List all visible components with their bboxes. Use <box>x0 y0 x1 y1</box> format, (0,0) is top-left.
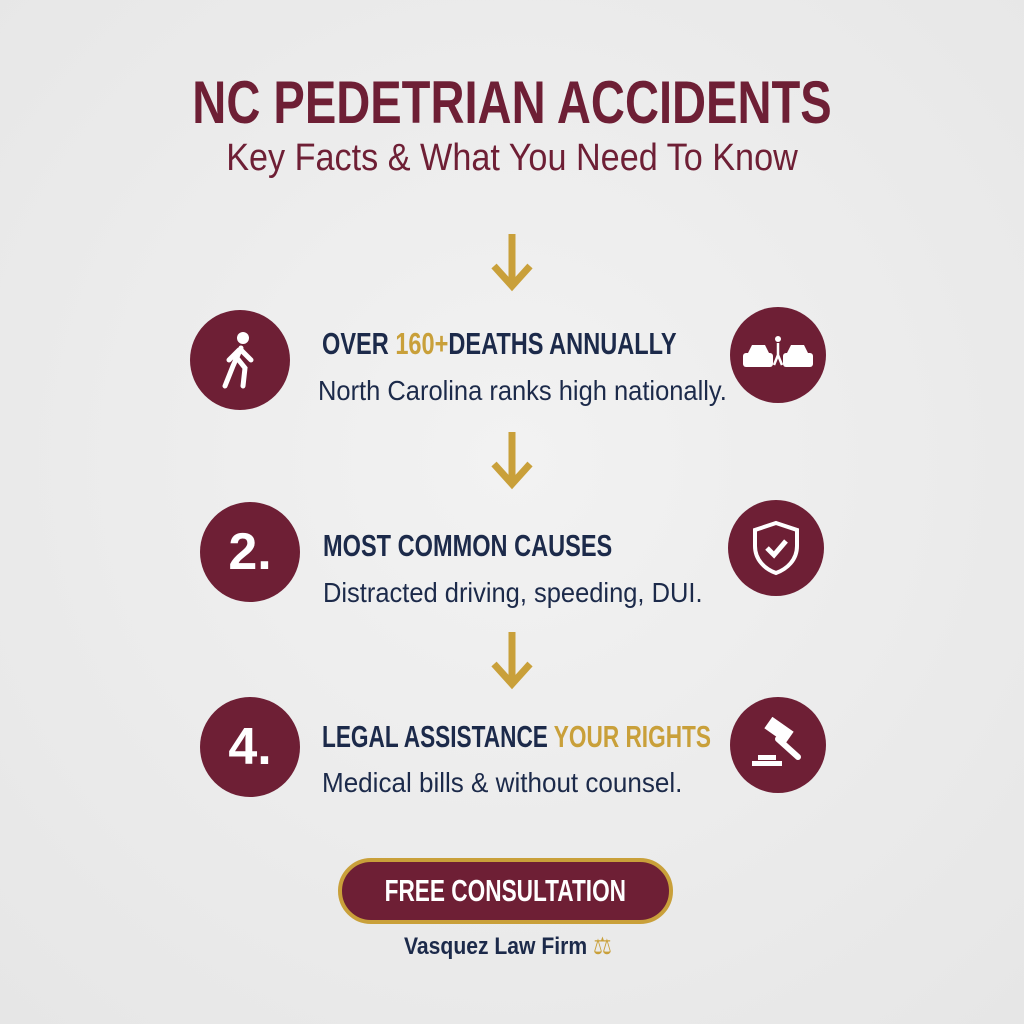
subtitle: Key Facts & What You Need To Know <box>226 137 798 179</box>
icon: gavel circle <box>730 697 826 793</box>
number 4 circle: 4. <box>228 718 272 776</box>
heading row 3: LEGAL ASSISTANCE YOUR RIGHTS <box>322 719 711 754</box>
heading row 2: MOST COMMON CAUSES <box>323 528 612 563</box>
footer: firm name: Vasquez Law Firm ⚖ <box>404 932 612 960</box>
number 2 circle: 2. <box>228 523 272 581</box>
arrow 1 <box>492 234 532 292</box>
heading row 1: OVER 160+DEATHS ANNUALLY <box>322 326 677 361</box>
text row 2: Distracted driving, speeding, DUI. <box>323 577 703 608</box>
button: free consultation: FREE CONSULTATION <box>385 873 626 908</box>
arrow 3 <box>492 632 532 690</box>
number 2 circle <box>200 502 300 602</box>
icon: pedestrian circle <box>190 310 290 410</box>
number 4 circle <box>200 697 300 797</box>
button: free consultation <box>338 858 673 924</box>
icon: shield circle <box>728 500 824 596</box>
icon: cars circle <box>730 307 826 403</box>
arrow 2 <box>492 432 532 490</box>
title: NC PEDETRIAN ACCIDENTS <box>192 69 832 136</box>
text row 1: North Carolina ranks high nationally. <box>318 375 727 406</box>
text row 3: Medical bills & without counsel. <box>322 767 682 798</box>
